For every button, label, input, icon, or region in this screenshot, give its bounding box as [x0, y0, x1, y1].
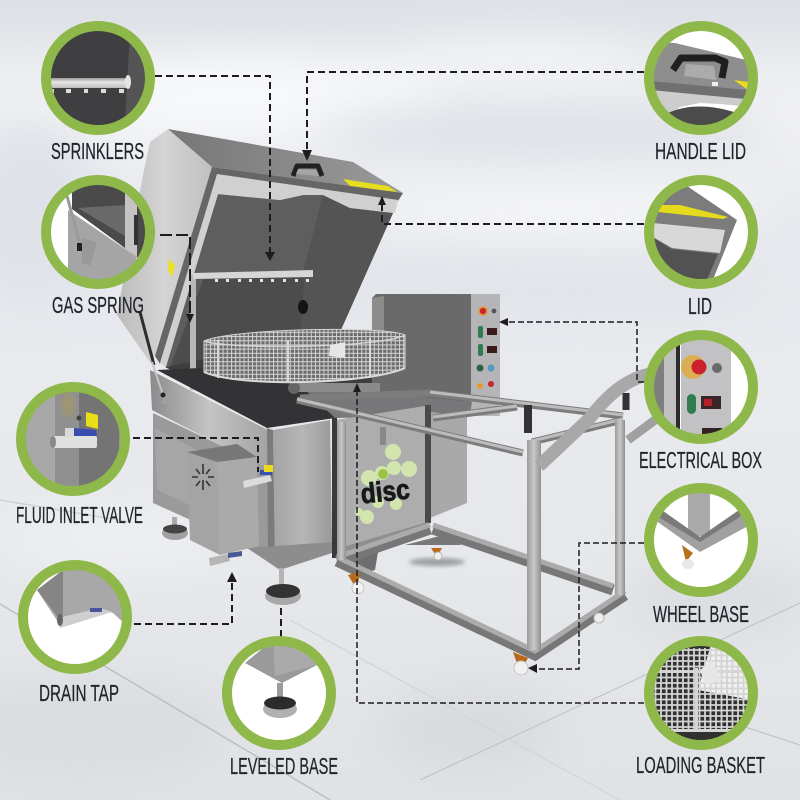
- cart posts: [527, 440, 541, 650]
- sprinkler pipe: [190, 270, 313, 390]
- fluid inlet valve: [243, 465, 273, 488]
- leader: lid: [378, 196, 644, 224]
- tank left wedge: [150, 370, 268, 470]
- cart pushing handle: [539, 373, 655, 466]
- tank top surface: [157, 368, 380, 428]
- disc logo: disc: [359, 473, 411, 509]
- label: lid: LID: [688, 293, 712, 319]
- label: fluid inlet valve: FLUID INLET VALVE: [16, 502, 143, 528]
- label: gas spring: GAS SPRING: [52, 292, 144, 318]
- tank front face: [273, 420, 332, 558]
- tank interior behind basket: [165, 332, 372, 400]
- yellow warning strip: [343, 179, 397, 192]
- handle on lid: [293, 166, 322, 176]
- leader: leveled base: [280, 606, 282, 637]
- leader: fluid inlet valve: [133, 438, 258, 472]
- icon: gas spring detail: [45, 180, 151, 286]
- icon: leveled base detail: [226, 640, 332, 746]
- lid interior: [165, 194, 393, 367]
- leader: loading basket: [353, 383, 644, 703]
- hole: [298, 300, 308, 314]
- lid frame strips: [155, 167, 403, 364]
- drain tap: [209, 551, 242, 566]
- icon: sprinklers detail: [45, 25, 151, 131]
- cart frame: [297, 392, 625, 655]
- leader: wheel base: [528, 543, 644, 673]
- grips: [524, 405, 532, 433]
- icon: lid detail: [649, 180, 753, 284]
- disc logo: [355, 444, 417, 524]
- electrical cabinet: [372, 294, 500, 416]
- label: handle lid: HANDLE LID: [655, 138, 746, 164]
- leader: sprinklers: [155, 76, 275, 261]
- label: drain tap: DRAIN TAP: [39, 680, 119, 706]
- icon: handle lid detail: [649, 26, 755, 132]
- leader: electrical box: [499, 318, 644, 382]
- icon: loading basket detail: [649, 641, 753, 745]
- lid side panel: [117, 129, 212, 365]
- basket: [204, 329, 405, 394]
- bottom skirt: [247, 542, 335, 570]
- lid top panel: [168, 129, 403, 193]
- warning sticker: [168, 259, 175, 277]
- label: wheel base: WHEEL BASE: [653, 601, 749, 627]
- leader: gas spring: [160, 235, 194, 323]
- leveling feet: [162, 517, 301, 605]
- icon: drain tap detail: [22, 565, 128, 671]
- label: leveled base: LEVELED BASE: [230, 753, 338, 779]
- icon: wheel base detail: [649, 488, 753, 592]
- tank lower left face: [153, 413, 275, 558]
- leader: handle lid: [302, 72, 644, 161]
- icon: fluid inlet valve detail: [20, 385, 126, 493]
- leader: drain tap: [134, 572, 237, 624]
- machine illustration: [117, 129, 655, 675]
- label: sprinklers: SPRINKLERS: [51, 138, 144, 164]
- machine shadow: [409, 558, 465, 566]
- casters: [348, 548, 604, 675]
- gas spring strut: [140, 312, 172, 405]
- filter box: [187, 444, 259, 555]
- center cabinet: [332, 405, 467, 575]
- icon: electrical box detail: [649, 335, 753, 440]
